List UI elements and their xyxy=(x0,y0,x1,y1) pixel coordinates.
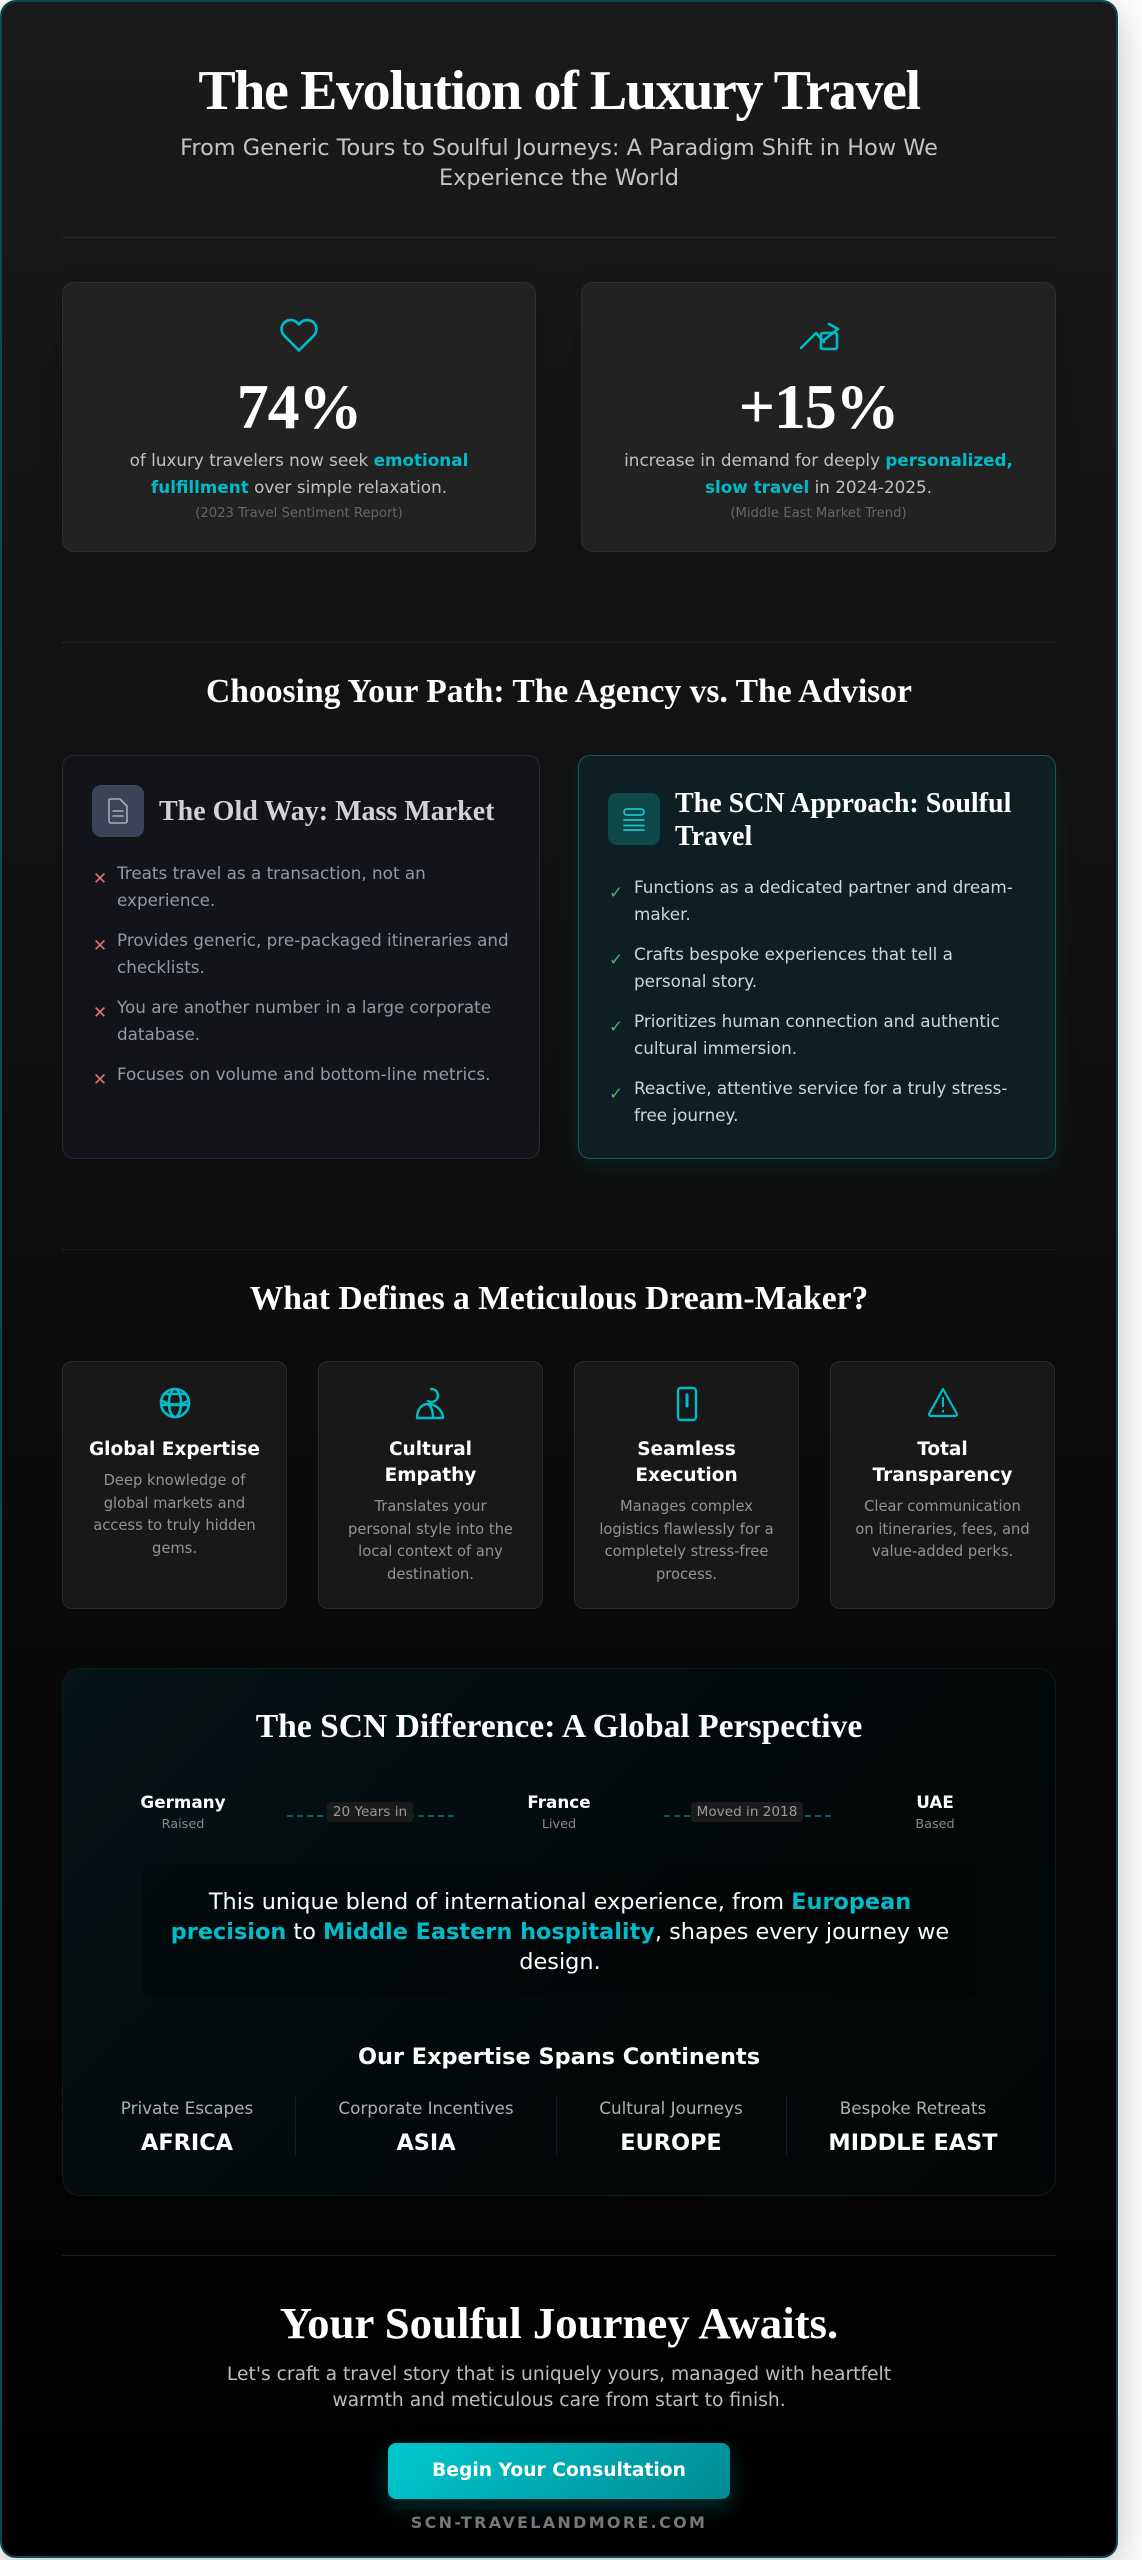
old way list: ✕ xyxy=(93,868,107,888)
panel: seamless execution xyxy=(574,1361,799,1609)
node: UAE xyxy=(915,1792,955,1832)
SCN list: cultural immersion. xyxy=(634,1038,797,1058)
region: Africa: AFRICA xyxy=(141,2130,233,2156)
SCN list: maker. xyxy=(634,904,691,924)
region: Asia: ASIA xyxy=(396,2130,456,2156)
SCN list: ✓ xyxy=(609,882,623,902)
panel: the old way xyxy=(62,755,540,1159)
footer text: Let's craft a travel story that is uniquely yours, managed with heartfelt xyxy=(227,2364,891,2385)
old way list: ✕ xyxy=(93,1069,107,1089)
title: Transparency xyxy=(872,1465,1012,1486)
subtitle: Experience the World xyxy=(439,164,679,190)
subtitle: From Generic Tours to Soulful Journeys: A Paradigm Shift in How We xyxy=(180,134,938,160)
panel: the SCN approach xyxy=(578,755,1056,1159)
old way list: ✕ xyxy=(93,935,107,955)
heading: choosing your path: Choosing Your Path: The Agency vs. The Advisor xyxy=(206,673,912,710)
description: on itineraries, fees, and xyxy=(855,1521,1030,1538)
description: gems. xyxy=(152,1540,197,1557)
icon: person xyxy=(416,1388,444,1420)
old way list: Provides generic, pre-packaged itineraries and xyxy=(117,930,509,950)
title xyxy=(635,1439,738,1486)
node: Germany: Germany xyxy=(140,1792,226,1812)
SCN list: Functions as a dedicated partner and dream- xyxy=(634,877,1013,897)
region: Middle East: Bespoke Retreats xyxy=(840,2098,986,2118)
SCN heading: The SCN Approach: Soulful xyxy=(675,788,1011,819)
connector: moved 2018: Moved in 2018 xyxy=(697,1804,797,1820)
stat text: fulfillment over simple relaxation. xyxy=(151,477,447,497)
stat source: (2023 Travel Sentiment Report) xyxy=(195,506,403,521)
node: Germany: Raised xyxy=(162,1817,204,1832)
region: Asia: Corporate Incentives xyxy=(338,2098,514,2118)
old way list: database. xyxy=(117,1024,200,1044)
panel: total transparency xyxy=(830,1361,1055,1609)
description xyxy=(348,1498,513,1583)
connector: 20 years: 20 Years in xyxy=(333,1804,407,1820)
region: Europe xyxy=(599,2098,743,2156)
old way list: checklists. xyxy=(117,957,205,977)
footer text: warmth and meticulous care from start to finish. xyxy=(332,2390,786,2411)
node: UAE: Based xyxy=(915,1817,955,1832)
SCN list: ✓ xyxy=(609,1016,623,1036)
old way list: Focuses on volume and bottom-line metrics. xyxy=(117,1064,490,1084)
node: France: Lived xyxy=(542,1817,576,1832)
title: The Evolution of Luxury Travel xyxy=(198,60,920,122)
stat text: slow travel in 2024-2025. xyxy=(705,477,932,497)
heading: The SCN Difference: A Global Perspective xyxy=(256,1708,862,1745)
panel: cultural empathy xyxy=(318,1361,543,1609)
stat text: increase in demand for deeply personalized, xyxy=(624,450,1013,470)
region: Middle East: MIDDLE EAST xyxy=(828,2130,998,2156)
quote box xyxy=(142,1864,978,1998)
SCN list: personal story. xyxy=(634,971,757,991)
old way list: ✕ xyxy=(93,1002,107,1022)
stat text xyxy=(624,450,1013,497)
region: Middle East xyxy=(828,2098,998,2156)
footer text xyxy=(227,2364,891,2411)
icon: heart xyxy=(280,318,318,352)
stat number: +15% xyxy=(739,371,898,442)
quote box: design. xyxy=(519,1948,601,1974)
icon: layers xyxy=(608,793,660,845)
title xyxy=(872,1439,1012,1486)
stat text: of luxury travelers now seek emotional xyxy=(130,450,468,470)
old way list xyxy=(93,863,509,1089)
title: Seamless xyxy=(637,1439,736,1460)
quote box: precision to Middle Eastern hospitality, shapes every journey we xyxy=(171,1918,949,1944)
panel: the SCN difference xyxy=(62,1668,1056,2196)
quote box: This unique blend of international experience, from European xyxy=(209,1888,911,1914)
description: logistics flawlessly for a xyxy=(599,1521,774,1538)
subheading: continents: Our Expertise Spans Continents xyxy=(358,2044,760,2070)
description: global markets and xyxy=(104,1495,245,1512)
description xyxy=(855,1498,1030,1560)
footer heading: Your Soulful Journey Awaits. xyxy=(280,2298,838,2348)
title: Global Expertise xyxy=(89,1439,260,1460)
icon: device xyxy=(676,1386,698,1422)
region: Europe: EUROPE xyxy=(620,2130,722,2156)
call-to-action button xyxy=(388,2443,730,2499)
expertise regions xyxy=(121,2096,998,2156)
old way heading: The Old Way: Mass Market xyxy=(159,796,494,827)
SCN list: free journey. xyxy=(634,1105,738,1125)
website url: SCN-TRAVELANDMORE.COM xyxy=(411,2513,707,2532)
SCN list: Crafts bespoke experiences that tell a xyxy=(634,944,953,964)
description: completely stress-free xyxy=(605,1543,768,1560)
node: Germany xyxy=(140,1792,226,1832)
old way list: You are another number in a large corporate xyxy=(117,997,491,1017)
stat source: (Middle East Market Trend) xyxy=(730,506,907,521)
title: Empathy xyxy=(385,1465,476,1486)
node: France: France xyxy=(527,1792,591,1812)
region: Europe: Cultural Journeys xyxy=(599,2098,743,2118)
region: Africa: Private Escapes xyxy=(121,2098,253,2118)
region: Africa xyxy=(121,2098,253,2156)
SCN list: ✓ xyxy=(609,949,623,969)
description xyxy=(93,1472,256,1557)
icon: warning xyxy=(928,1388,958,1418)
title: Cultural xyxy=(389,1439,472,1460)
region: Asia xyxy=(338,2098,514,2156)
SCN list xyxy=(609,877,1013,1125)
SCN heading xyxy=(675,788,1011,852)
node: UAE: UAE xyxy=(916,1792,954,1812)
heading: dream-maker: What Defines a Meticulous Dream-Maker? xyxy=(250,1280,868,1317)
description xyxy=(599,1498,774,1583)
description: access to truly hidden xyxy=(93,1517,256,1534)
old way list: experience. xyxy=(117,890,215,910)
title xyxy=(385,1439,476,1486)
description: Translates your xyxy=(374,1498,487,1515)
description: value-added perks. xyxy=(872,1543,1013,1560)
node: France xyxy=(527,1792,591,1832)
description: Deep knowledge of xyxy=(104,1472,245,1489)
description: local context of any xyxy=(358,1543,503,1560)
panel: global expertise xyxy=(62,1361,287,1609)
icon: document xyxy=(92,785,144,837)
old way list: Treats travel as a transaction, not an xyxy=(117,863,426,883)
description: Clear communication xyxy=(864,1498,1021,1515)
SCN heading: Travel xyxy=(675,821,752,852)
SCN list: Prioritizes human connection and authentic xyxy=(634,1011,1000,1031)
subtitle xyxy=(180,134,938,190)
title: Total xyxy=(917,1439,968,1460)
description: destination. xyxy=(387,1566,474,1583)
journey timeline xyxy=(140,1792,955,1832)
description: Manages complex xyxy=(620,1498,753,1515)
title: Execution xyxy=(635,1465,738,1486)
panel: stat 74% xyxy=(62,282,536,552)
icon: globe xyxy=(160,1388,190,1418)
SCN list: Reactive, attentive service for a truly stress- xyxy=(634,1078,1007,1098)
SCN list: ✓ xyxy=(609,1083,623,1103)
description: personal style into the xyxy=(348,1521,513,1538)
description: process. xyxy=(656,1566,717,1583)
call-to-action button: Begin Your Consultation xyxy=(432,2460,686,2481)
panel: stat +15% xyxy=(581,282,1056,552)
icon: trending up xyxy=(800,322,840,350)
stat number: 74% xyxy=(237,371,361,442)
stat text xyxy=(130,450,468,497)
